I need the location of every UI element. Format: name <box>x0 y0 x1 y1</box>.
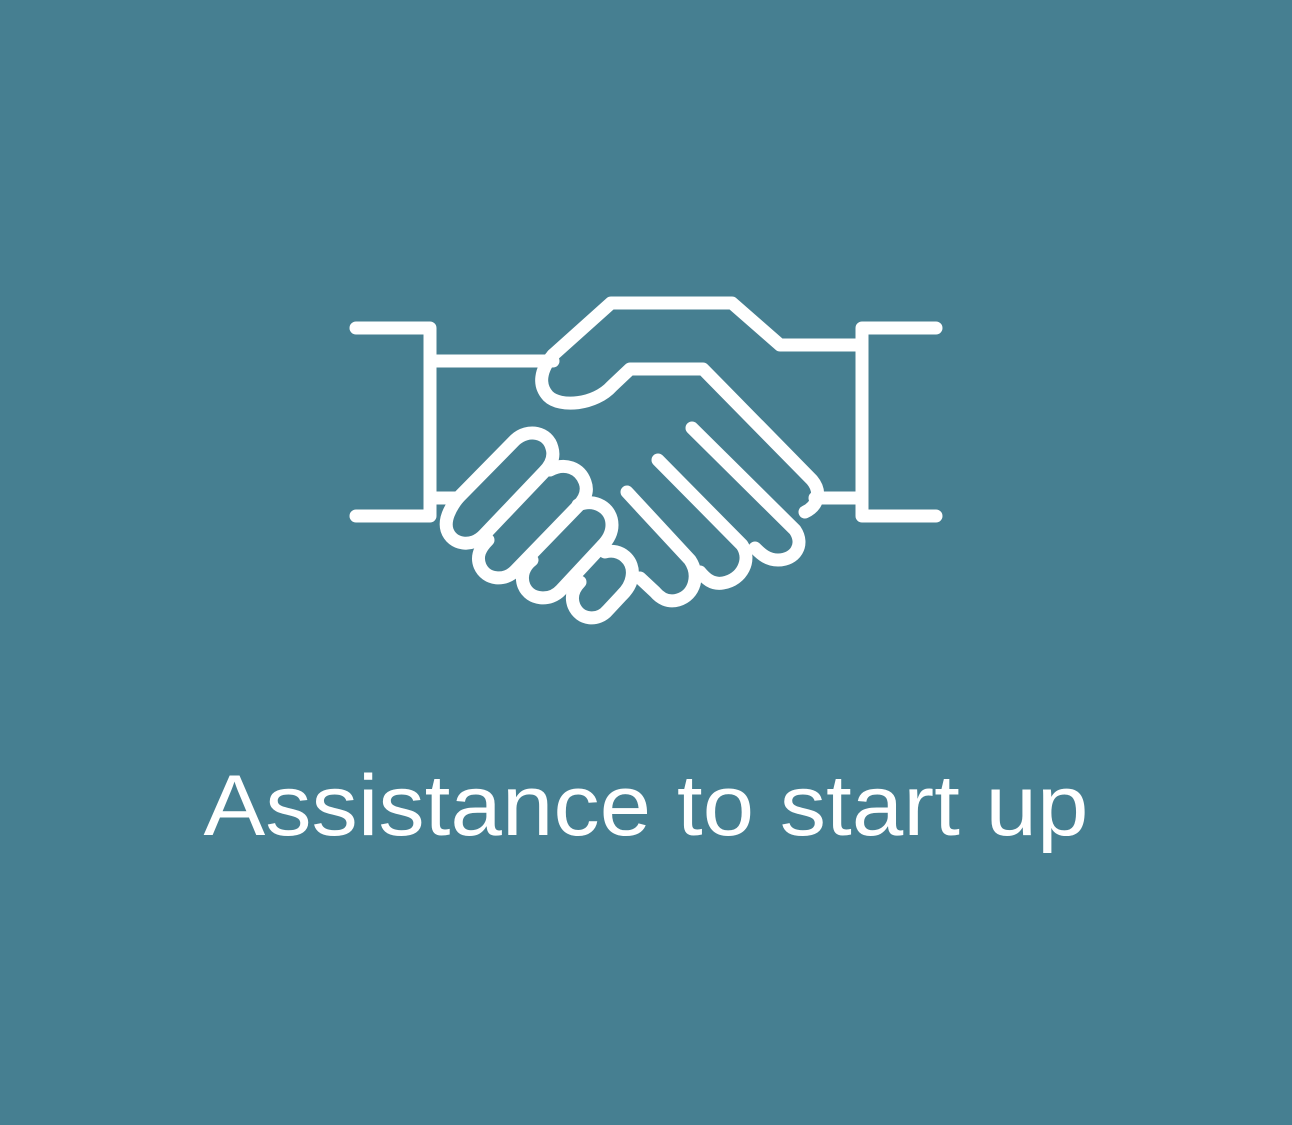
right hand finger lines <box>692 428 799 560</box>
left cuff <box>356 328 430 516</box>
title: Assistance to start up <box>204 758 1088 854</box>
left hand fingers <box>446 433 553 543</box>
upper hand and thumb <box>553 303 862 355</box>
right cuff <box>862 328 936 516</box>
icon: handshake <box>356 303 936 618</box>
left sleeve bottom <box>430 492 458 504</box>
left sleeve top <box>430 354 553 368</box>
